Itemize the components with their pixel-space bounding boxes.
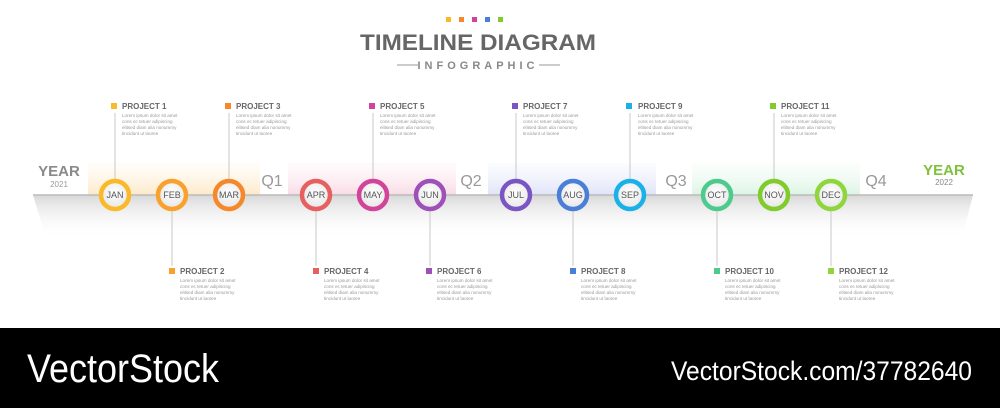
top projects: PROJECT 7: [523, 102, 568, 111]
top projects: elitsed diam alia nonummy: [781, 125, 836, 130]
top projects: cons ec tetuer adipiscing: [781, 119, 832, 124]
month circles: MAR: [219, 190, 240, 200]
month circles: JUN: [421, 190, 439, 200]
bottom projects: Lorem ipsum dolor sit amet: [581, 278, 637, 283]
top projects: PROJECT 5: [380, 102, 425, 111]
top projects: Lorem ipsum dolor sit amet: [638, 113, 694, 118]
top projects: tincidunt ut laoree: [122, 131, 159, 136]
month circles: JAN: [106, 190, 124, 200]
year 2022: YEAR: [923, 162, 965, 179]
top projects: elitsed diam alia nonummy: [638, 125, 693, 130]
month circles: OCT: [708, 190, 727, 200]
connector lines: [115, 113, 831, 266]
top projects: Lorem ipsum dolor sit amet: [122, 113, 178, 118]
footer bar: VectorStock: [27, 347, 220, 391]
bottom projects: cons ec tetuer adipiscing: [725, 284, 776, 289]
top projects: tincidunt ut laoree: [236, 131, 273, 136]
month circles: AUG: [563, 190, 583, 200]
month circles: SEP: [621, 190, 639, 200]
bottom projects: elitsed diam alia nonummy: [725, 290, 780, 295]
top projects: tincidunt ut laoree: [781, 131, 818, 136]
quarter labels: [261, 173, 887, 190]
bottom projects: PROJECT 2: [180, 267, 225, 276]
bottom projects: PROJECT 4: [324, 267, 369, 276]
bottom projects: elitsed diam alia nonummy: [839, 290, 894, 295]
top projects: cons ec tetuer adipiscing: [380, 119, 431, 124]
bottom projects: PROJECT 12: [839, 267, 888, 276]
quarter labels: Q4: [865, 173, 887, 190]
quarter labels: Q1: [261, 173, 283, 190]
top projects: cons ec tetuer adipiscing: [523, 119, 574, 124]
year 2021: [38, 163, 80, 189]
month circles: MAY: [364, 190, 382, 200]
year 2022: [923, 162, 965, 187]
footer bar: VectorStock.com/37782640: [671, 356, 972, 386]
month circles: [101, 181, 845, 209]
timeline line: [33, 194, 973, 196]
bottom projects: Lorem ipsum dolor sit amet: [725, 278, 781, 283]
month circles: APR: [307, 190, 326, 200]
top projects: [111, 102, 837, 136]
top projects: Lorem ipsum dolor sit amet: [523, 113, 579, 118]
year 2022: 2022: [935, 178, 953, 187]
bottom projects: cons ec tetuer adipiscing: [324, 284, 375, 289]
bottom projects: tincidunt ut laoree: [839, 296, 876, 301]
bottom projects: elitsed diam alia nonummy: [180, 290, 235, 295]
bottom projects: PROJECT 6: [437, 267, 482, 276]
top projects: PROJECT 3: [236, 102, 281, 111]
top projects: PROJECT 1: [122, 102, 167, 111]
subtitle: INFOGRAPHIC: [418, 60, 538, 72]
top projects: tincidunt ut laoree: [638, 131, 675, 136]
footer bar: [0, 328, 1000, 408]
top projects: Lorem ipsum dolor sit amet: [236, 113, 292, 118]
month circles: JUL: [508, 190, 524, 200]
bottom projects: elitsed diam alia nonummy: [324, 290, 379, 295]
bottom projects: PROJECT 10: [725, 267, 774, 276]
top projects: PROJECT 11: [781, 102, 830, 111]
bottom projects: cons ec tetuer adipiscing: [581, 284, 632, 289]
top projects: elitsed diam alia nonummy: [380, 125, 435, 130]
top projects: elitsed diam alia nonummy: [523, 125, 578, 130]
bottom projects: cons ec tetuer adipiscing: [437, 284, 488, 289]
bottom projects: tincidunt ut laoree: [725, 296, 762, 301]
bottom projects: tincidunt ut laoree: [437, 296, 474, 301]
top projects: tincidunt ut laoree: [380, 131, 417, 136]
bottom projects: Lorem ipsum dolor sit amet: [324, 278, 380, 283]
top projects: tincidunt ut laoree: [523, 131, 560, 136]
quarter labels: Q3: [665, 173, 687, 190]
top projects: Lorem ipsum dolor sit amet: [781, 113, 837, 118]
top projects: elitsed diam alia nonummy: [236, 125, 291, 130]
top projects: cons ec tetuer adipiscing: [236, 119, 287, 124]
bottom projects: Lorem ipsum dolor sit amet: [437, 278, 493, 283]
bottom projects: [169, 267, 895, 301]
bottom projects: tincidunt ut laoree: [324, 296, 361, 301]
month circles: DEC: [821, 190, 841, 200]
top projects: elitsed diam alia nonummy: [122, 125, 177, 130]
bottom projects: tincidunt ut laoree: [581, 296, 618, 301]
year 2021: 2021: [50, 180, 68, 189]
month circles: NOV: [764, 190, 784, 200]
title: TIMELINE DIAGRAM: [360, 30, 596, 55]
bottom projects: elitsed diam alia nonummy: [437, 290, 492, 295]
month circles: FEB: [163, 190, 181, 200]
bottom projects: Lorem ipsum dolor sit amet: [180, 278, 236, 283]
timeline shadow: [33, 195, 973, 238]
bottom projects: cons ec tetuer adipiscing: [839, 284, 890, 289]
bottom projects: PROJECT 8: [581, 267, 626, 276]
top projects: cons ec tetuer adipiscing: [122, 119, 173, 124]
quarter labels: Q2: [460, 173, 482, 190]
bottom projects: Lorem ipsum dolor sit amet: [839, 278, 895, 283]
top projects: PROJECT 9: [638, 102, 683, 111]
bottom projects: elitsed diam alia nonummy: [581, 290, 636, 295]
bottom projects: tincidunt ut laoree: [180, 296, 217, 301]
top projects: Lorem ipsum dolor sit amet: [380, 113, 436, 118]
year 2021: YEAR: [38, 163, 80, 180]
color dots: [446, 17, 503, 22]
bottom projects: cons ec tetuer adipiscing: [180, 284, 231, 289]
top projects: cons ec tetuer adipiscing: [638, 119, 689, 124]
quarter bands: [88, 163, 860, 195]
